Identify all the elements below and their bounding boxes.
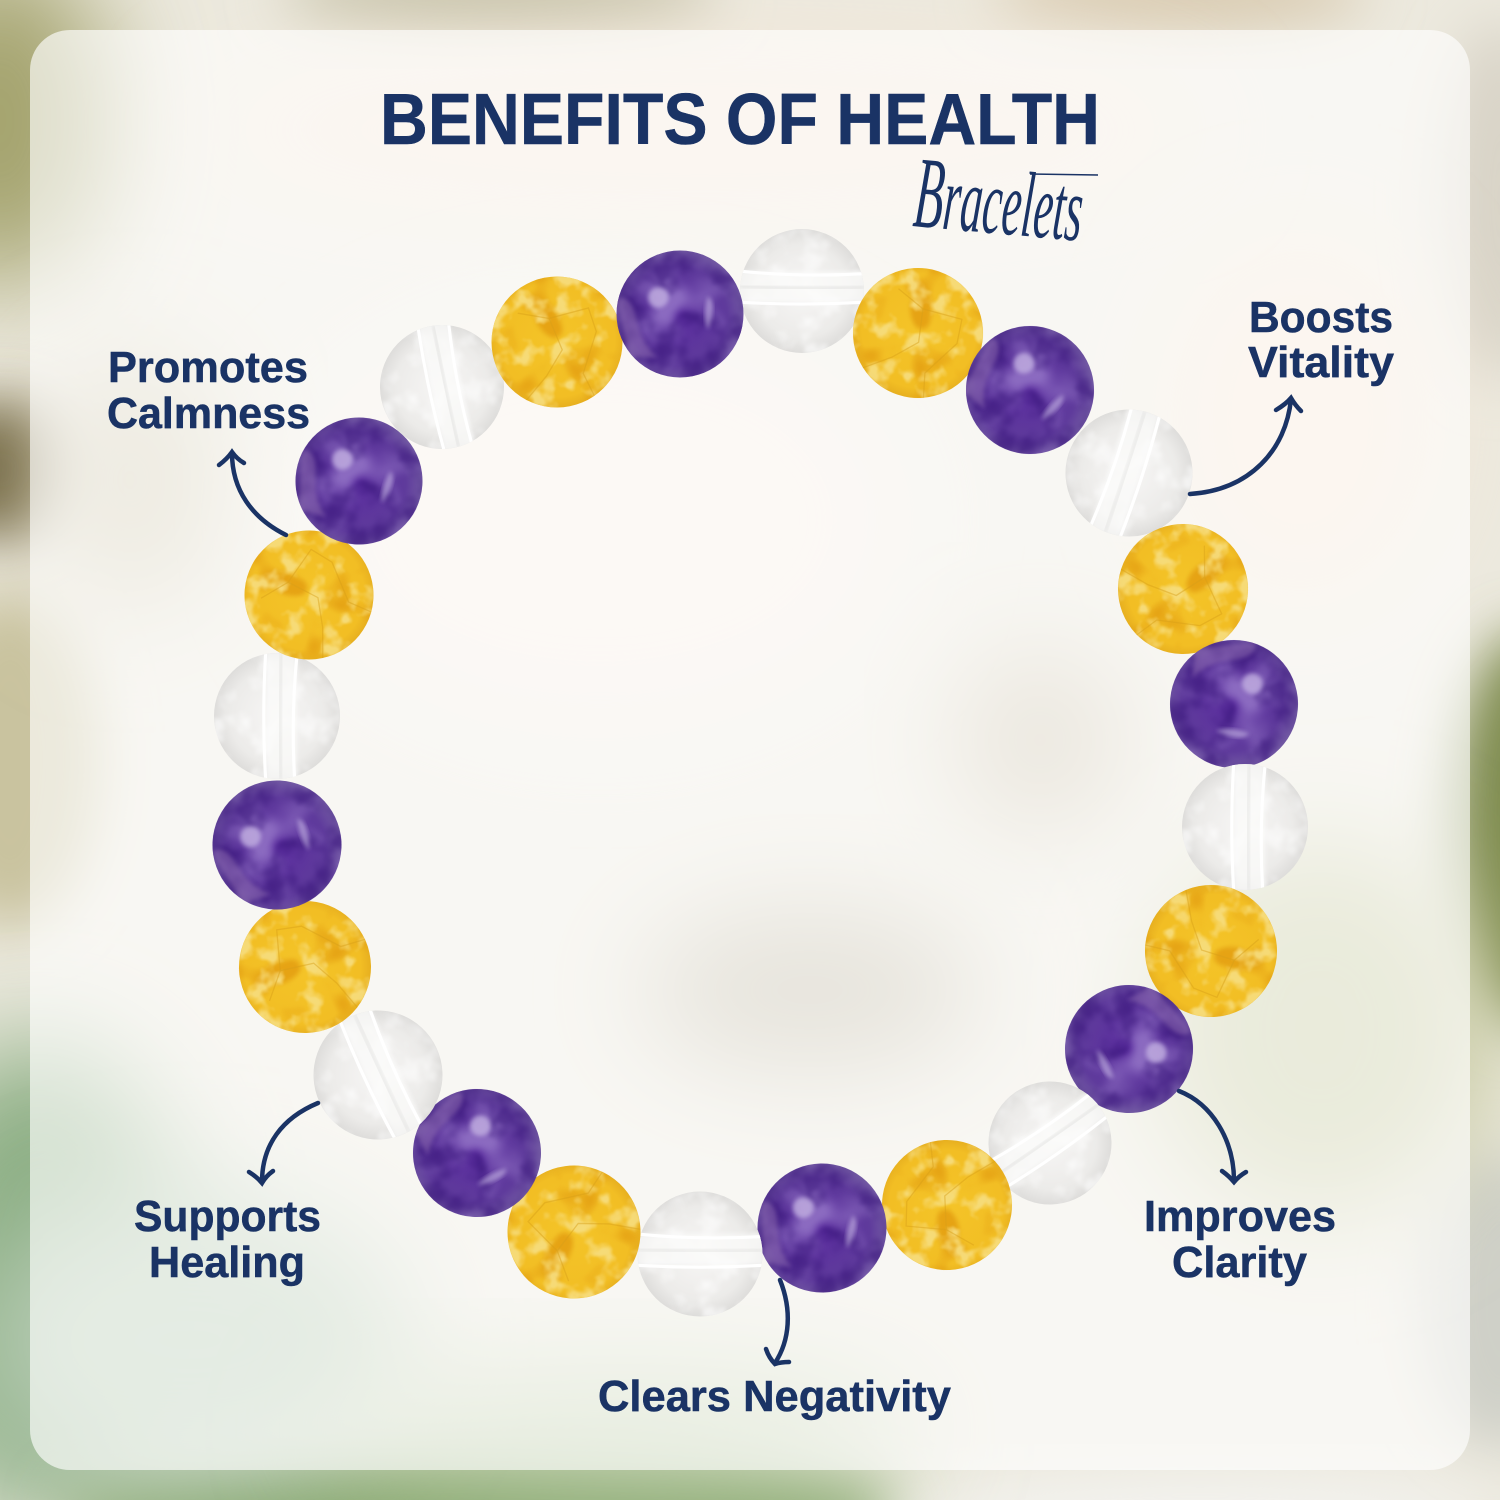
bead: clear quartz: [1048, 391, 1210, 555]
label: Promotes Calmness: Promotes: [108, 343, 308, 392]
label: Improves Clarity: Clarity: [1172, 1238, 1308, 1287]
bracelet: [194, 229, 1308, 1323]
label: Boosts Vitality: [1248, 293, 1395, 387]
arrow: to Promotes Calmness: [219, 452, 286, 535]
bead: citrine: [1118, 858, 1304, 1044]
bead: amethyst: [194, 762, 360, 928]
bead: citrine: [864, 1122, 1030, 1288]
bead: citrine: [1108, 514, 1258, 664]
label: Supports Healing: Healing: [149, 1238, 305, 1287]
bead: amethyst: [1165, 635, 1303, 773]
label: Boosts Vitality: Boosts: [1249, 293, 1393, 342]
bead: citrine: [492, 276, 622, 408]
arrow: to Boosts Vitality: [1190, 398, 1301, 494]
label: Promotes Calmness: Calmness: [107, 389, 310, 438]
title: BENEFITS OF HEALTH: [380, 80, 1100, 160]
bead: clear quartz: [962, 1056, 1138, 1230]
label: Clears Negativity: Clears Negativity: [598, 1372, 952, 1421]
bead: clear quartz: [738, 229, 866, 353]
label: Boosts Vitality: Vitality: [1248, 338, 1395, 387]
arrow: to Supports Healing: [249, 1103, 318, 1183]
bead: amethyst: [747, 1153, 897, 1303]
label: Improves Clarity: [1144, 1192, 1336, 1287]
bead: citrine: [829, 244, 1007, 422]
bead: amethyst: [940, 300, 1120, 480]
bead: amethyst: [1042, 962, 1216, 1136]
bead: citrine: [218, 504, 400, 686]
script subtitle: Bracelets: [910, 137, 1088, 264]
bead: clear quartz: [635, 1192, 765, 1316]
bead: amethyst: [281, 403, 437, 559]
bead: clear quartz: [368, 311, 516, 463]
arrow: to Improves Clarity: [1179, 1091, 1246, 1182]
label: Promotes Calmness: [107, 343, 310, 438]
bead: clear quartz: [291, 987, 465, 1163]
bead: citrine: [483, 1141, 665, 1323]
label: Improves Clarity: Improves: [1144, 1192, 1336, 1241]
bead: amethyst: [390, 1066, 564, 1240]
label: Supports Healing: [134, 1192, 321, 1287]
bead: clear quartz: [214, 650, 340, 782]
bead: amethyst: [616, 250, 744, 378]
label: Supports Healing: Supports: [134, 1192, 321, 1241]
arrow: to Clears Negativity: [766, 1280, 789, 1364]
bead: citrine: [229, 891, 381, 1043]
bead: clear quartz: [1182, 761, 1308, 893]
